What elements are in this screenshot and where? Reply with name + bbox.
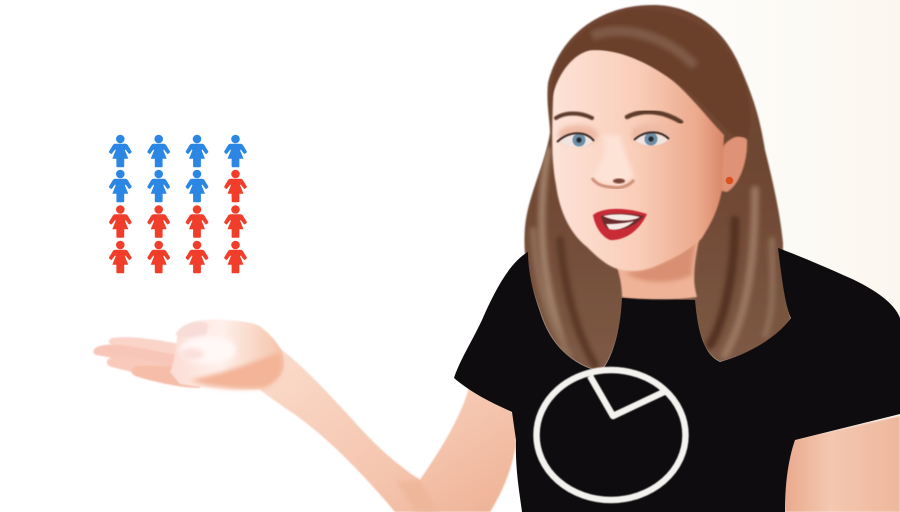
palm crease [180, 348, 204, 360]
icon grid: 16 female figures, 7 blue and 9 red [109, 135, 247, 273]
fingers [109, 337, 185, 358]
hair: sheen on crown [592, 31, 695, 66]
palm lower shadow [190, 352, 282, 389]
hair: back [524, 5, 791, 372]
palm highlight [180, 336, 236, 364]
open hand [93, 320, 284, 390]
neck [612, 235, 700, 299]
blue figures [109, 135, 247, 202]
eyes [557, 124, 671, 147]
left eye [560, 135, 593, 147]
eyebrows [556, 112, 681, 122]
t-shirt pie chart logo [536, 370, 686, 500]
nose shadow [592, 178, 634, 188]
teeth [603, 214, 640, 230]
lips [593, 209, 647, 240]
ear [718, 136, 747, 192]
thumb shadow [176, 322, 208, 338]
arm: right [784, 416, 900, 512]
arm: left forearm and upper arm [260, 345, 517, 512]
left eyebrow [556, 114, 592, 118]
mouth [593, 209, 647, 240]
nose highlight [592, 135, 634, 185]
mouth interior [601, 213, 644, 230]
left eye shadow [558, 125, 598, 145]
shade: inner elbow [396, 480, 440, 512]
right eye [634, 134, 668, 146]
nostril [613, 178, 625, 184]
hair: parted fringe over forehead [550, 10, 751, 138]
nose [592, 135, 634, 188]
neck shadow [625, 235, 697, 282]
face [552, 50, 724, 271]
slice [590, 376, 666, 416]
palm [170, 320, 284, 390]
ear stud [726, 177, 733, 184]
circle [536, 370, 686, 500]
hair strands [533, 150, 772, 365]
red figures [109, 170, 247, 273]
right eyebrow [627, 112, 681, 122]
right eye shadow [631, 124, 671, 144]
black t-shirt [454, 248, 900, 512]
